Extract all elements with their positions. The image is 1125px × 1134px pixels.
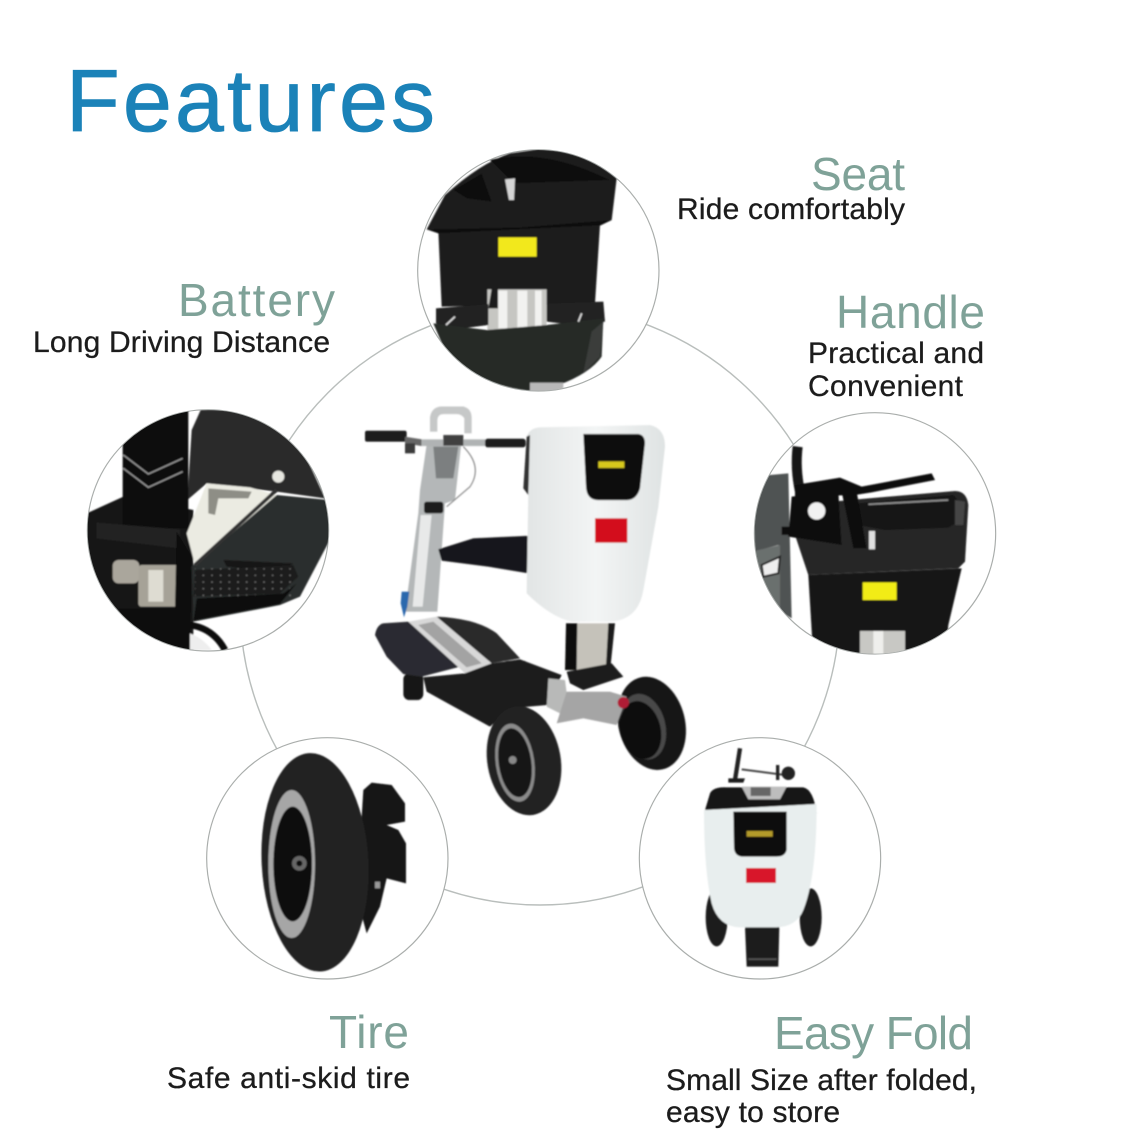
label: seat [677, 148, 905, 226]
handlebar [365, 431, 526, 453]
central scooter [365, 407, 695, 821]
blue latch [401, 592, 409, 617]
white battery body [523, 425, 665, 622]
label: handle: Convenient [808, 370, 964, 403]
stem and folding handle [405, 407, 475, 612]
label: handle [808, 286, 985, 403]
label: easy fold: easy to store [666, 1096, 840, 1129]
label: easy fold: Small Size after folded, [666, 1064, 977, 1097]
label: battery: Long Driving Distance [33, 326, 330, 359]
label: battery [33, 274, 335, 359]
label: easy fold [666, 1007, 977, 1129]
label: battery: Battery [178, 274, 335, 326]
label: handle: Practical and [808, 337, 984, 370]
front wheel [478, 700, 570, 821]
label: seat: Ride comfortably [677, 193, 905, 226]
label: tire: Safe anti-skid tire [167, 1062, 410, 1095]
panel: battery detail [87, 407, 333, 653]
rear wheel [608, 669, 695, 777]
label: handle: Handle [836, 286, 985, 338]
footboard [375, 617, 629, 727]
label: tire [167, 1006, 410, 1095]
panel: tire detail [207, 738, 448, 979]
label: seat: Seat [811, 148, 905, 200]
title: Features [66, 51, 435, 150]
panel: seat detail [418, 149, 659, 393]
connecting ring [240, 305, 840, 905]
post [565, 623, 623, 690]
panel: easy fold detail [639, 738, 881, 979]
label: easy fold: Easy Fold [774, 1007, 973, 1059]
panel: handle detail [752, 413, 996, 661]
label: tire: Tire [329, 1006, 409, 1058]
seat [438, 536, 532, 573]
